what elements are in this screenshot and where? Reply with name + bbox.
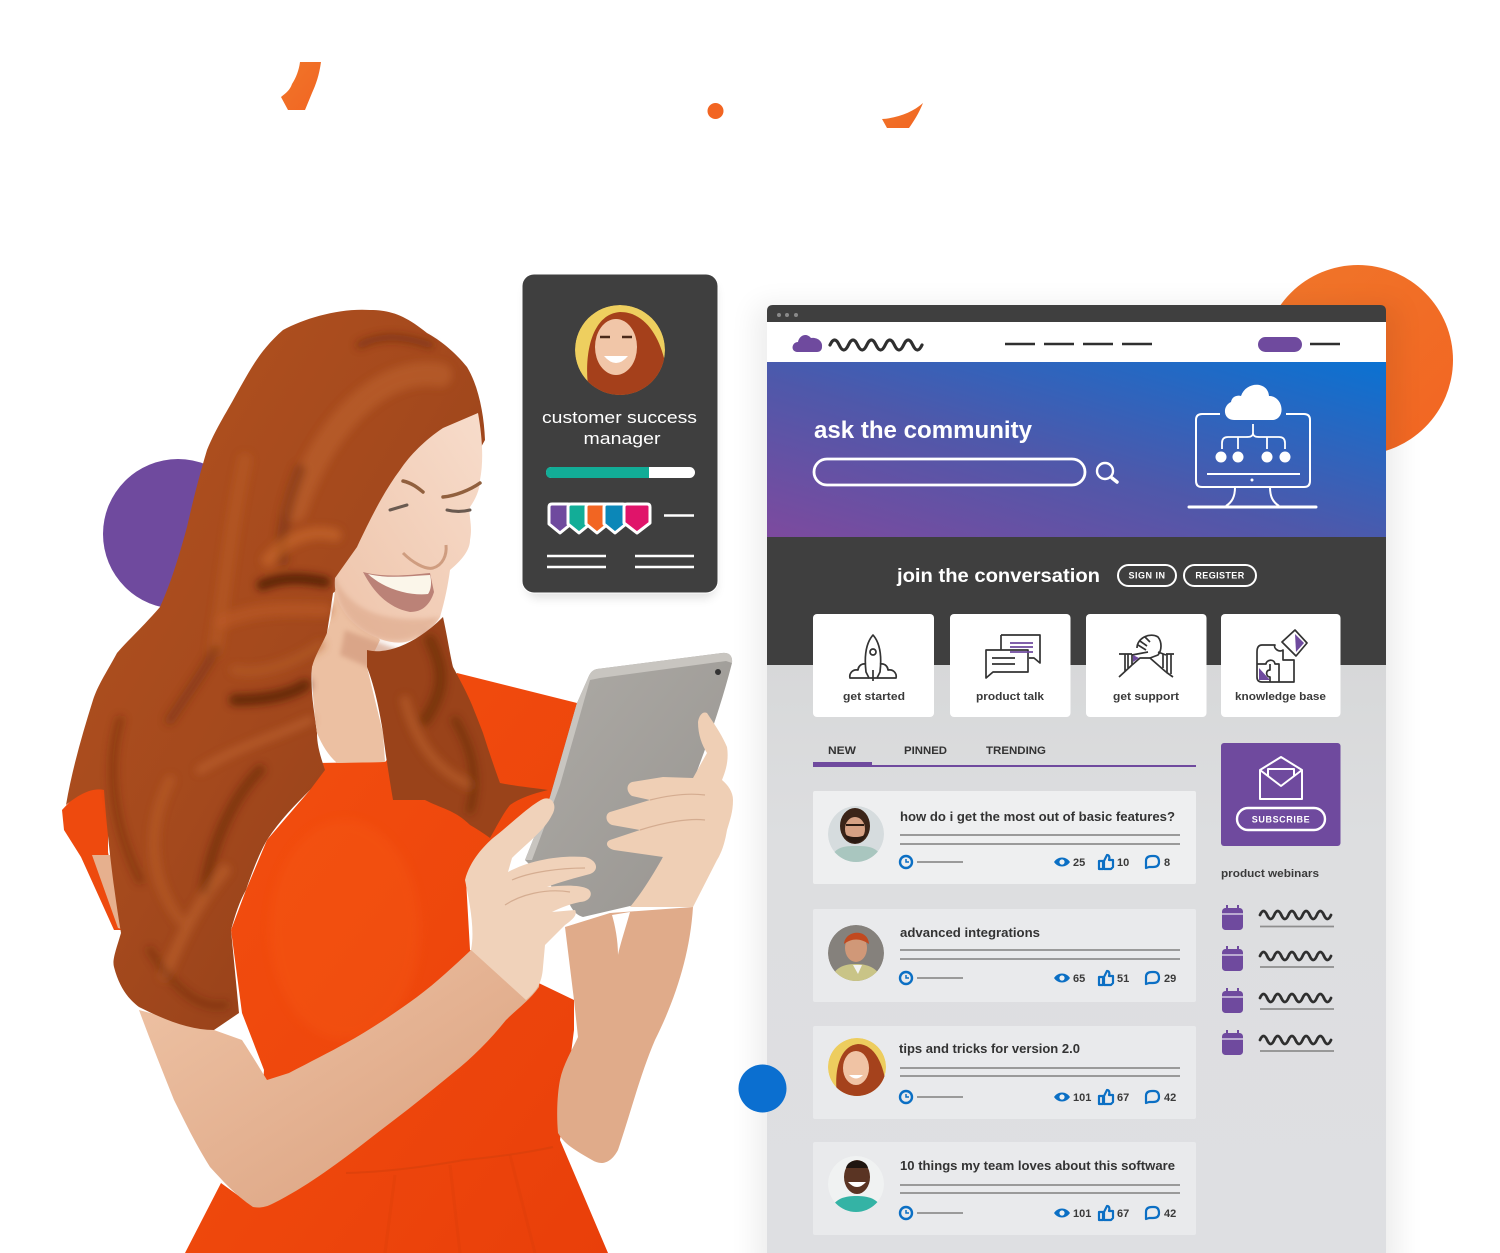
woman: dress light and folds	[270, 820, 553, 1253]
woman: finger details	[505, 794, 705, 905]
post stats	[900, 1090, 1176, 1104]
woman: eyebrows and eyes	[390, 481, 480, 512]
panel: light page body	[767, 665, 1386, 1253]
post: 10 things my team loves about this software	[813, 1142, 1196, 1235]
tabs: PINNED	[904, 745, 947, 757]
illustration: woman with tablet	[62, 310, 733, 1253]
woman: neck shadow	[340, 630, 400, 668]
woman: left hand	[465, 798, 596, 1000]
webinar list	[1222, 905, 1334, 1055]
heading: join the conversation: join the conversation	[896, 565, 1100, 587]
card: get support	[1086, 614, 1206, 717]
decorative orange dot	[708, 103, 724, 119]
label: customer success manager: manager	[584, 429, 661, 448]
post stats: 65	[1073, 973, 1085, 985]
icon: clasped hands	[1119, 635, 1174, 677]
tabs	[813, 745, 1196, 767]
woman: hair main	[66, 310, 485, 1030]
icon: magnifier	[1097, 463, 1117, 482]
blue dot	[738, 1064, 786, 1112]
post title: how do i get the most out of basic features?	[900, 809, 1175, 824]
woman: hair strands	[113, 338, 474, 1006]
card: product talk	[950, 614, 1070, 717]
post stats: 29	[1164, 973, 1176, 985]
woman: face shading	[335, 578, 440, 641]
avatar: red-haired woman	[828, 1038, 886, 1100]
heading: ask the community: ask the community	[814, 417, 1033, 444]
icon: puzzle pieces	[1257, 630, 1307, 682]
icon: rocket	[850, 635, 896, 681]
avatar: woman with red hat	[828, 925, 884, 985]
label: customer success manager	[542, 408, 697, 448]
avatar: man with glasses	[828, 806, 884, 864]
post stats: 10	[1117, 857, 1129, 869]
post title: tips and tricks for version 2.0	[899, 1041, 1080, 1056]
woman: left arm	[139, 950, 542, 1208]
post stats: 51	[1117, 973, 1129, 985]
heading: product webinars: product webinars	[1221, 868, 1319, 880]
decorative orange fragment top centre	[882, 103, 923, 128]
panel: join the conversation band	[767, 537, 1386, 665]
label: product talk: product talk	[976, 691, 1045, 703]
tablet	[525, 653, 732, 917]
woman: left sleeve	[62, 780, 122, 930]
post: tips and tricks for version 2.0	[813, 1026, 1196, 1119]
card: knowledge base	[1221, 614, 1340, 717]
button: sign in	[1118, 565, 1176, 586]
post stats: 25	[1073, 857, 1085, 869]
post: how do i get the most out of basic features	[813, 791, 1196, 884]
card: get started	[813, 614, 934, 717]
label: knowledge base: knowledge base	[1235, 691, 1326, 703]
search bar	[814, 459, 1085, 485]
label: customer success manager: customer success	[542, 408, 697, 427]
icon: cloud network monitor	[1189, 385, 1316, 507]
woman: right hand	[606, 712, 733, 907]
post stats	[900, 971, 1176, 985]
tabs: TRENDING	[986, 745, 1046, 757]
woman: right hair lock	[367, 617, 548, 838]
button: register	[1184, 565, 1256, 586]
post stats	[900, 855, 1170, 869]
woman: right arm	[557, 907, 693, 1163]
post stats: 101	[1073, 1092, 1091, 1104]
browser shadow	[756, 305, 1398, 1253]
woman: smile	[363, 572, 434, 612]
achievement badges	[549, 504, 650, 533]
panel: subscribe	[1221, 743, 1340, 846]
panel: community website browser window	[767, 305, 1386, 1253]
gap between arm and forearm	[612, 912, 630, 955]
panel: hero banner	[767, 362, 1386, 537]
post stats: 67	[1117, 1208, 1129, 1220]
post stats: 8	[1164, 857, 1170, 869]
navigation bar	[767, 322, 1386, 362]
label: get started: get started	[843, 691, 905, 703]
decorative orange fragment top left	[281, 62, 321, 110]
progress bar	[546, 467, 695, 478]
woman: nose	[403, 545, 446, 568]
button: register: REGISTER	[1195, 570, 1245, 580]
post stats: 67	[1117, 1092, 1129, 1104]
post title: advanced integrations	[900, 925, 1040, 940]
post title: 10 things my team loves about this software	[900, 1158, 1175, 1173]
purple circle behind woman	[103, 459, 253, 609]
tabs: NEW	[828, 745, 857, 757]
woman: upper arm behind hair	[92, 855, 125, 930]
orange circle behind browser	[1263, 265, 1453, 455]
avatar: customer success manager	[575, 305, 668, 398]
post stats: 101	[1073, 1208, 1091, 1220]
panel: customer success manager profile	[522, 274, 718, 593]
label: get support: get support	[1113, 691, 1179, 703]
browser title bar	[767, 305, 1386, 322]
icon: open envelope	[1260, 757, 1302, 799]
woman: neck	[312, 590, 385, 763]
button: subscribe: SUBSCRIBE	[1252, 814, 1310, 824]
post stats	[900, 1206, 1176, 1220]
woman: dress	[185, 673, 608, 1253]
post: advanced integrations	[813, 909, 1196, 1002]
post stats: 42	[1164, 1208, 1176, 1220]
avatar: smiling man	[835, 1160, 878, 1212]
button: sign in: SIGN IN	[1128, 570, 1166, 580]
post stats: 42	[1164, 1092, 1176, 1104]
icon: chat bubbles	[986, 635, 1040, 678]
card shadow	[526, 282, 716, 598]
text placeholders	[547, 516, 694, 567]
woman: face	[335, 413, 482, 643]
